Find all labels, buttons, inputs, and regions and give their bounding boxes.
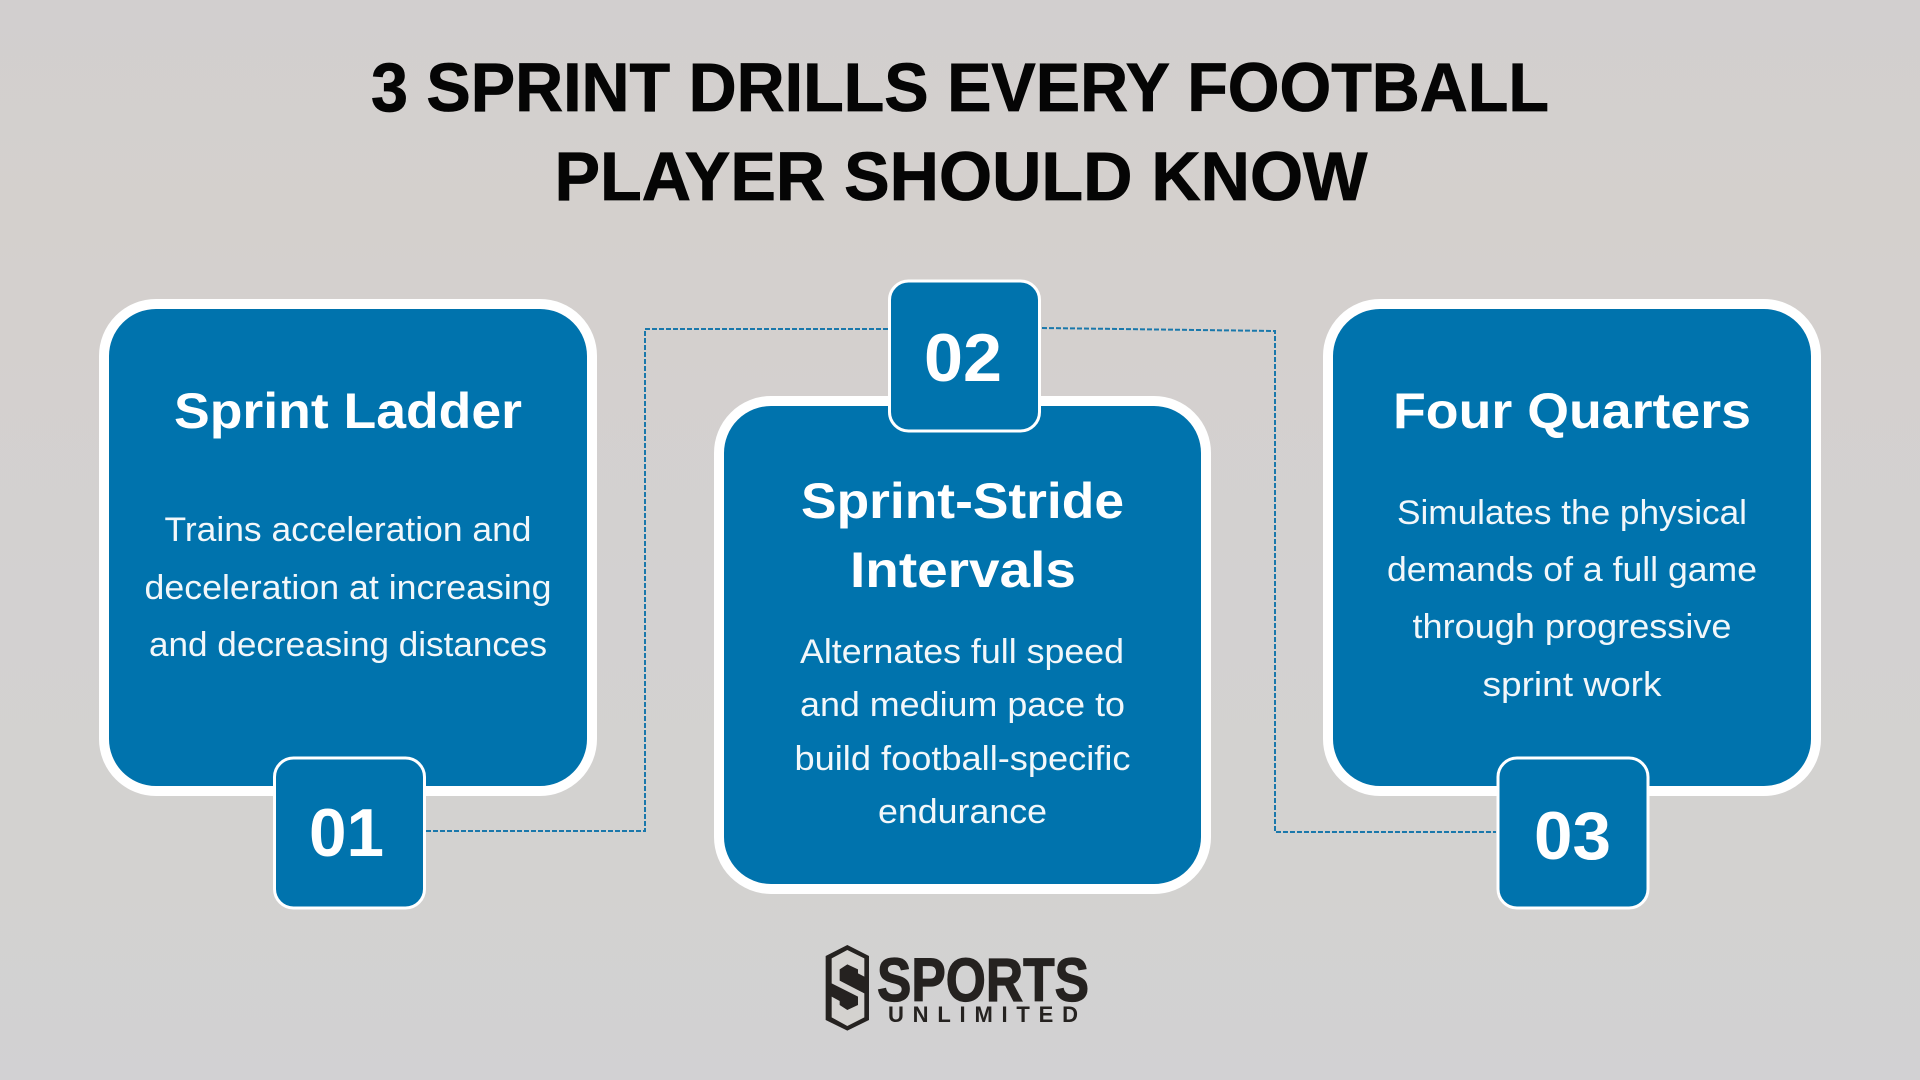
heading: Sprint Ladder: Sprint Ladder <box>174 383 522 439</box>
badge: 01: 01 <box>309 795 384 871</box>
text block: Sprint Ladder description: Trains acceleration and <box>164 511 532 549</box>
text block: Sprint Ladder description: deceleration at increasing <box>144 569 552 607</box>
text block: Sprint-Stride Intervals description: build football-specific <box>794 740 1130 778</box>
text block: Sprint Ladder description: and decreasing distances <box>149 626 547 664</box>
text block: Sprint-Stride Intervals description: endurance <box>878 793 1047 831</box>
panel: Sprint Ladder <box>104 304 592 908</box>
panel: Four Quarters <box>1328 304 1816 908</box>
heading: Four Quarters: Four Quarters <box>1393 383 1751 439</box>
connector: 01 to 02 <box>426 329 888 831</box>
text block: Four Quarters description: Simulates the physical <box>1397 494 1747 532</box>
text block: Sprint-Stride Intervals description: and medium pace to <box>800 686 1125 724</box>
panel: Sprint-Stride Intervals <box>719 281 1206 889</box>
badge: 02 <box>890 281 1040 431</box>
text block: Four Quarters description: sprint work <box>1482 666 1663 704</box>
title: PLAYER SHOULD KNOW <box>554 138 1368 215</box>
badge: 03 <box>1498 758 1648 908</box>
text block: Sprint-Stride Intervals description: Alternates full speed <box>800 633 1124 671</box>
title: 3 SPRINT DRILLS EVERY FOOTBALL <box>371 49 1549 126</box>
title <box>371 49 1549 215</box>
connector: 02 to 03 <box>1042 328 1496 832</box>
text block: Sprint-Stride Intervals description <box>794 633 1130 831</box>
icon: S shield <box>826 945 869 1031</box>
logo: Sports Unlimited: SPORTS <box>877 946 1089 1014</box>
text block: Four Quarters description: through progressive <box>1412 608 1732 646</box>
text block: Four Quarters description: demands of a full game <box>1387 551 1757 589</box>
heading: Sprint-Stride Intervals: Intervals <box>850 542 1076 598</box>
heading: Sprint-Stride Intervals: Sprint-Stride <box>801 473 1124 529</box>
badge: 03: 03 <box>1534 798 1611 874</box>
logo: Sports Unlimited <box>826 945 1089 1031</box>
heading: Sprint-Stride Intervals <box>801 473 1124 598</box>
badge: 01 <box>274 758 424 908</box>
text block: Sprint Ladder description <box>144 511 552 664</box>
text block: Four Quarters description <box>1387 494 1757 704</box>
badge: 02: 02 <box>924 320 1002 396</box>
logo: Sports Unlimited: UNLIMITED <box>888 1002 1078 1027</box>
